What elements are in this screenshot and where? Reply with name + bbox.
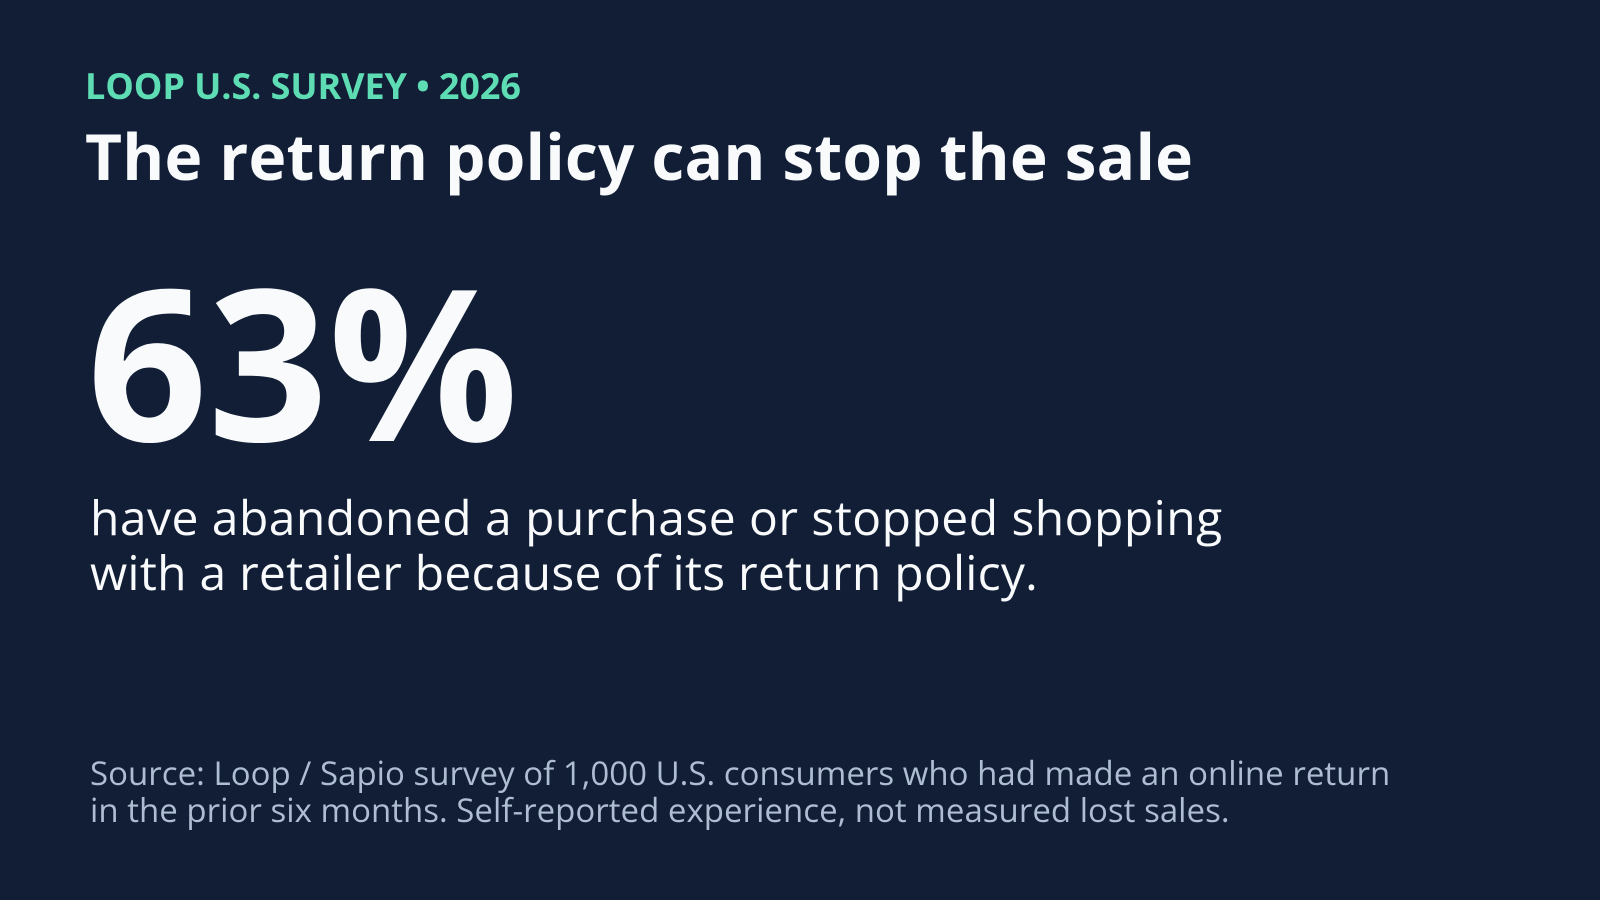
statistic description: with a retailer because of its return policy. (90, 540, 1038, 605)
source note (90, 750, 1390, 832)
statistic description: have abandoned a purchase or stopped shopping (90, 485, 1223, 550)
statistic description (90, 485, 1223, 605)
source note: in the prior six months. Self-reported experience, not measured lost sales. (90, 787, 1230, 832)
eyebrow label: LOOP U.S. SURVEY • 2026 (85, 61, 521, 110)
title: The return policy can stop the sale (85, 112, 1193, 199)
big statistic: 63% (87, 215, 518, 503)
source note: Source: Loop / Sapio survey of 1,000 U.S. consumers who had made an online return (90, 750, 1390, 795)
